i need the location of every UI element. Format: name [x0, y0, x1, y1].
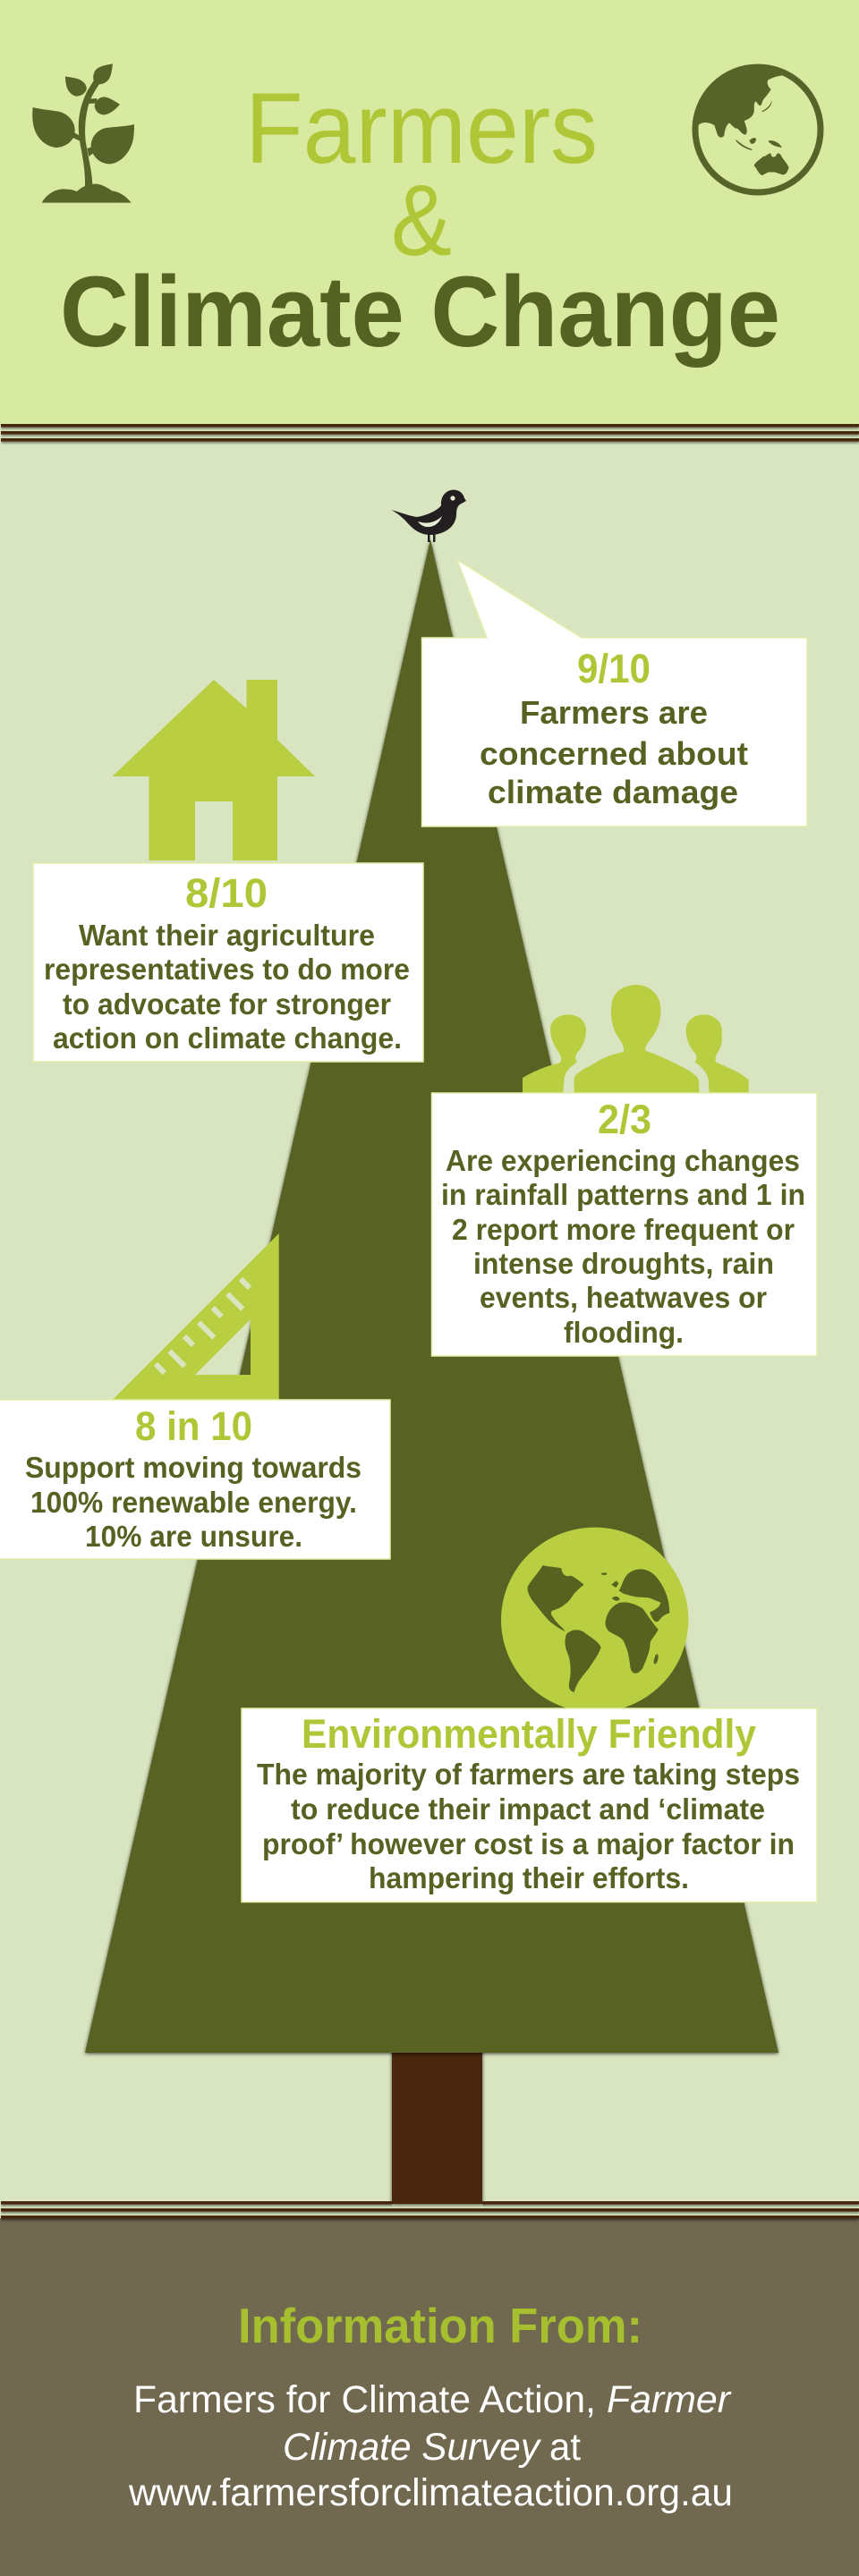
text: agriculture representatives: action on climate change.	[53, 1021, 402, 1055]
text: rainfall changes: Are experiencing changes	[446, 1144, 800, 1177]
stat: 9/10: 9/10	[577, 646, 651, 691]
text: rainfall changes: in rainfall patterns and 1 in	[441, 1178, 805, 1211]
icon: house	[113, 680, 315, 860]
icon: group of people	[523, 985, 749, 1093]
text: steps to reduce impact	[257, 1758, 800, 1894]
text: steps to reduce impact: hampering their efforts.	[369, 1861, 689, 1894]
text: source citation: Farmers for Climate Action,	[133, 2378, 596, 2421]
text: steps to reduce impact: The majority of farmers are taking steps	[257, 1758, 800, 1791]
text: source citation: at	[549, 2426, 581, 2469]
text: rainfall changes: 2 report more frequent or	[452, 1213, 795, 1246]
text: agriculture representatives: representatives to do more	[44, 953, 410, 986]
heading: Information From: Information From:	[238, 2298, 642, 2353]
heading: Environmentally Friendly: Environmentally Friendly	[302, 1711, 756, 1757]
icon: bird on tree top	[391, 490, 466, 542]
icon: earth globe Asia Pacific	[695, 67, 821, 192]
text: source citation: Farmer	[607, 2378, 732, 2421]
text: agriculture representatives	[44, 919, 410, 1055]
stat: 8 in 10: 8 in 10	[135, 1403, 252, 1449]
text: source citation	[128, 2378, 733, 2514]
icon: world globe	[501, 1528, 688, 1712]
text: farmers concerned: Farmers are	[520, 694, 708, 731]
title: Climate Change: Climate Change	[60, 256, 780, 368]
panel: 8 in 10 box	[0, 1400, 390, 1559]
stat: 2/3: 2/3	[598, 1097, 651, 1142]
panel: 9/10 speech bubble	[422, 560, 807, 826]
stat: 8/10: 8/10	[185, 870, 268, 916]
panel: 2/3 box	[431, 1093, 817, 1356]
text: farmers concerned: concerned about	[480, 735, 748, 772]
text: rainfall changes	[441, 1144, 805, 1349]
title: Farmers: Farmers	[245, 72, 598, 184]
text: source citation: www.farmersforclimateaction.org.au	[128, 2471, 733, 2514]
footer panel	[0, 2218, 859, 2576]
text: renewable energy: Support moving towards	[25, 1451, 361, 1484]
text: renewable energy: 100% renewable energy.	[30, 1486, 357, 1519]
header panel	[0, 0, 859, 425]
text: rainfall changes: events, heatwaves or	[480, 1281, 767, 1314]
text: renewable energy: 10% are unsure.	[85, 1520, 302, 1553]
panel: Environmentally Friendly box	[242, 1708, 817, 1902]
text: farmers concerned	[480, 694, 748, 810]
bottom divider lines	[1, 2201, 859, 2218]
title: ampersand: &	[391, 165, 452, 276]
text: rainfall changes: flooding.	[564, 1316, 684, 1349]
tree canopy	[85, 539, 778, 2053]
icon: plant seedling	[32, 64, 134, 203]
text: source citation: Climate Survey	[283, 2426, 541, 2469]
panel: 8/10 box	[33, 863, 423, 1062]
icon: set square ruler	[110, 1233, 279, 1402]
text: steps to reduce impact: proof’ however cost is a major factor in	[262, 1827, 795, 1860]
text: agriculture representatives: Want their agriculture	[79, 919, 375, 952]
text: farmers concerned: climate damage	[488, 774, 738, 810]
tree trunk	[392, 2048, 482, 2204]
top divider lines	[1, 424, 859, 442]
text: agriculture representatives: to advocate for stronger	[63, 987, 391, 1021]
text: steps to reduce impact: to reduce their impact and ‘climate	[291, 1792, 765, 1826]
text: renewable energy	[25, 1451, 361, 1553]
text: rainfall changes: intense droughts, rain	[473, 1247, 774, 1280]
